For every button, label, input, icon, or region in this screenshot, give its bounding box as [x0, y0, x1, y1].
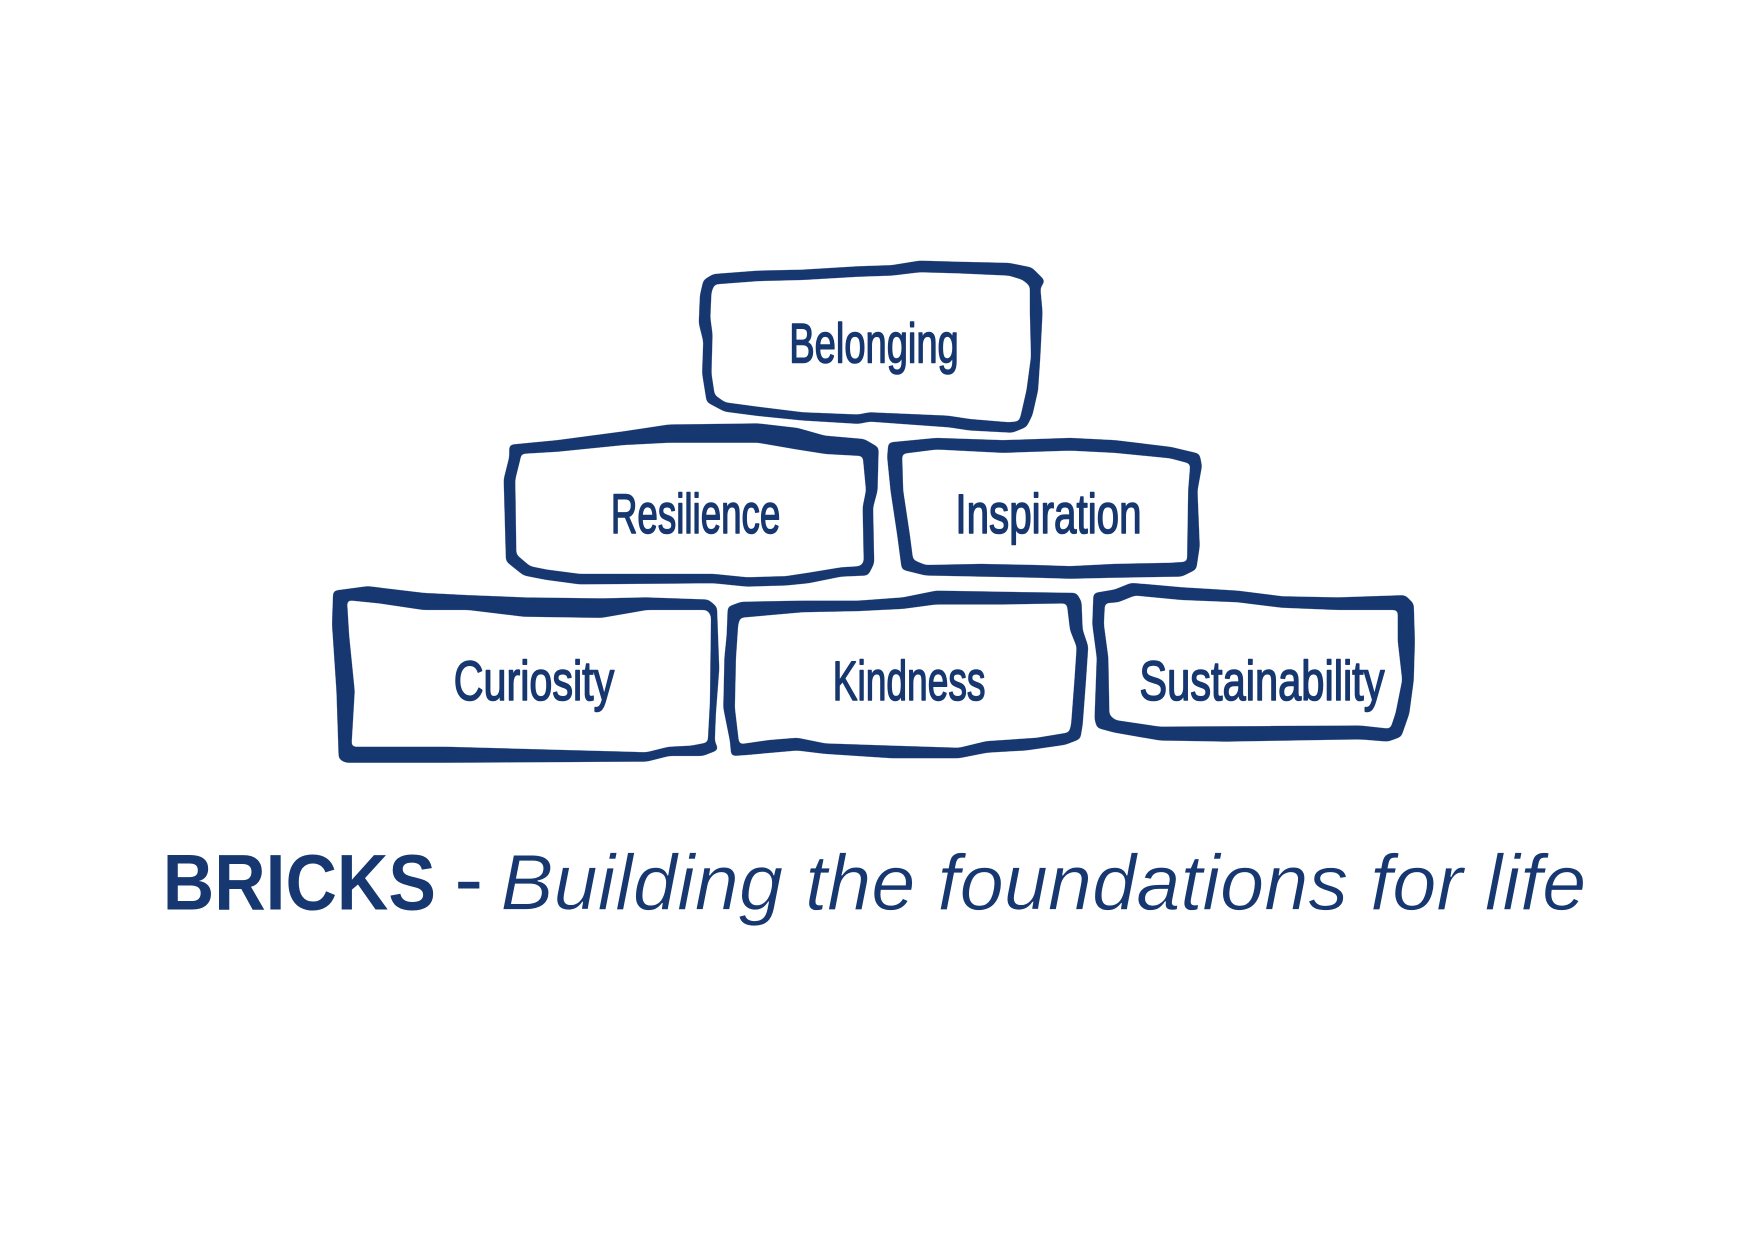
- brick: Belonging: [700, 262, 1043, 431]
- brick: Resilience: Resilience: [611, 483, 780, 545]
- title: BRICKS: [163, 838, 436, 927]
- brick: Resilience: [505, 425, 877, 585]
- brick: Belonging: Belonging: [789, 312, 959, 374]
- title: Building the foundations for life: [501, 838, 1586, 927]
- brick: Inspiration: [888, 439, 1201, 577]
- brick: Kindness: [725, 592, 1087, 757]
- brick: Curiosity: Curiosity: [454, 650, 614, 712]
- brick: Sustainability: [1094, 584, 1414, 740]
- brick: Curiosity: [333, 588, 718, 761]
- brick: Inspiration: Inspiration: [955, 483, 1142, 545]
- brick: Kindness: Kindness: [833, 650, 985, 712]
- brick: Sustainability: Sustainability: [1139, 650, 1385, 712]
